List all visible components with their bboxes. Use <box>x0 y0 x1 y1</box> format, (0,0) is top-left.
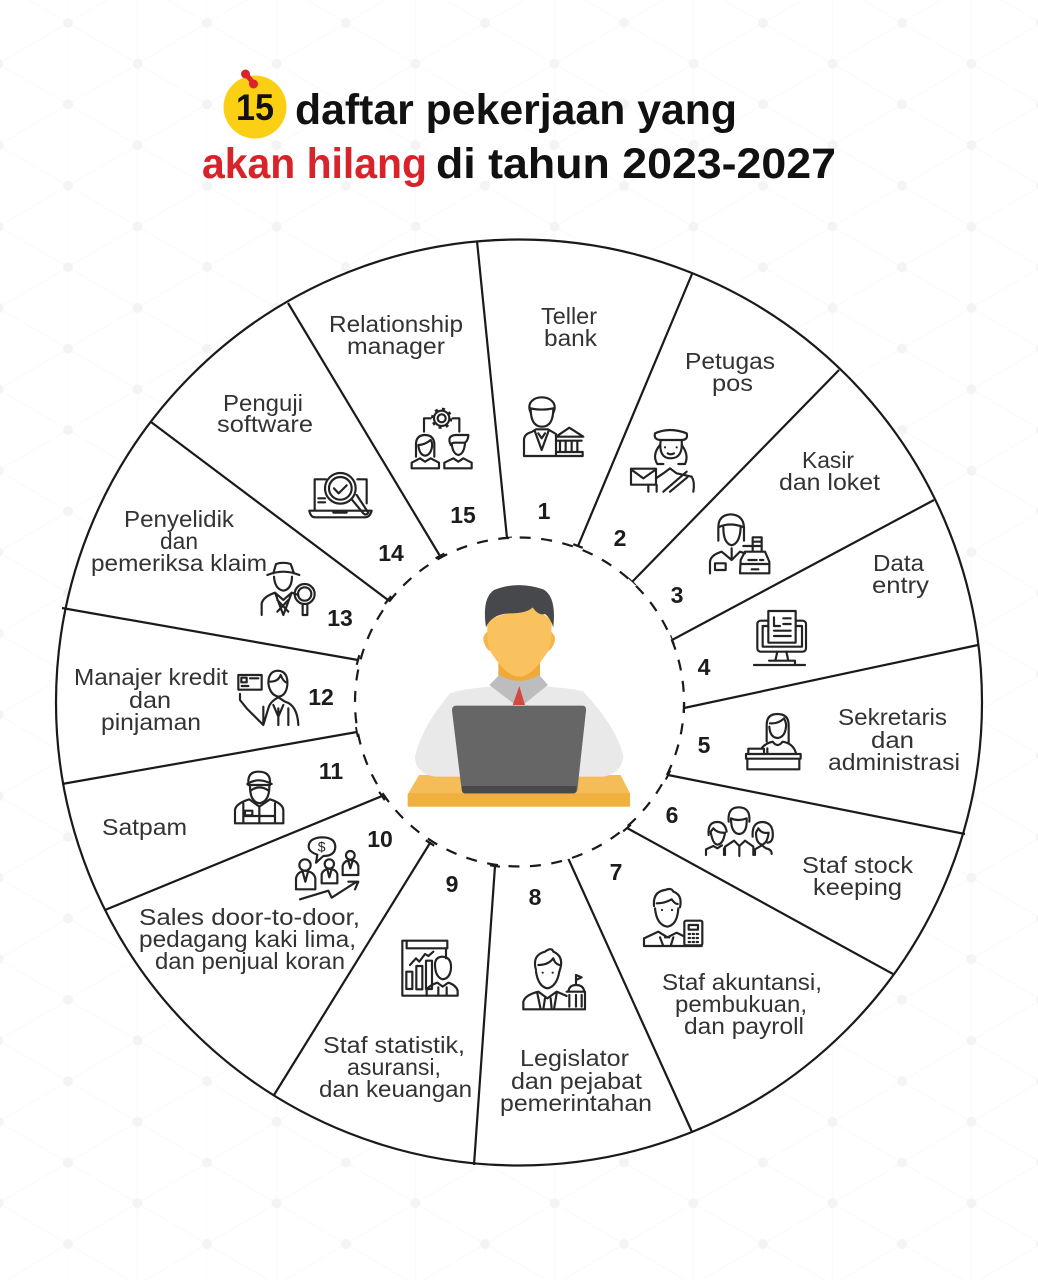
icon: yellow badge with number 15 and red pin: 15 <box>236 87 274 128</box>
label: Manajer kredit dan pinjaman: pinjaman <box>101 709 201 735</box>
number 5: 5 <box>698 732 711 758</box>
icon: laptop with magnifying glass and check <box>309 473 372 517</box>
icon: teller with bank building <box>524 397 583 456</box>
number 12: 12 <box>308 684 334 710</box>
label: Penguji software: software <box>217 411 313 437</box>
label: Petugas pos: Petugas <box>685 348 775 374</box>
label: Sales door-to-door, pedagang kaki lima, dan penjual koran: pedagang kaki lima, <box>139 926 356 952</box>
label: Penguji software <box>217 390 313 437</box>
icon: secretary at front desk <box>746 714 801 769</box>
number 9: 9 <box>446 871 458 897</box>
label: Staf akuntansi, pembukuan, dan payroll <box>662 969 822 1039</box>
number 11: 11 <box>319 758 343 784</box>
label: Penguji software: Penguji <box>223 390 303 416</box>
icon: postal worker with envelope <box>631 430 694 492</box>
label: Staf statistik, asuransi, dan keuangan: asuransi, <box>347 1054 441 1080</box>
label: Data entry <box>872 550 930 598</box>
label: Relationship manager: Relationship <box>329 311 463 337</box>
label: Kasir dan loket: Kasir <box>802 447 854 473</box>
segment 10: Sales door-to-door, pedagang kaki lima, dan penjual koran <box>139 826 393 974</box>
icon: yellow badge with number 15 and red pin <box>224 70 286 138</box>
number 4: 4 <box>698 654 711 680</box>
number 13: 13 <box>327 605 353 631</box>
label: Petugas pos: pos <box>712 370 753 396</box>
heading line 2 <box>202 140 836 188</box>
segment 13: Penyelidik dan pemeriksa klaim <box>91 506 353 631</box>
label: Staf stock keeping <box>802 852 914 900</box>
label: Legislator dan pejabat pemerintahan: dan pejabat <box>511 1068 643 1094</box>
label: Staf stock keeping: keeping <box>813 874 902 900</box>
label: Teller bank: bank <box>544 325 598 351</box>
title <box>202 70 836 188</box>
label: Penyelidik dan pemeriksa klaim <box>91 506 267 576</box>
icon: group of three people <box>706 807 773 856</box>
label: Manajer kredit dan pinjaman: dan <box>129 687 171 713</box>
label: Satpam: Satpam <box>102 814 187 840</box>
number 14: 14 <box>378 540 404 566</box>
label: Staf statistik, asuransi, dan keuangan <box>319 1032 472 1102</box>
label: Penyelidik dan pemeriksa klaim: Penyelidik <box>124 506 235 532</box>
label: Relationship manager: manager <box>347 333 445 359</box>
icon: computer monitor with document <box>754 611 806 665</box>
segment 12: Manajer kredit dan pinjaman <box>74 664 334 735</box>
icon: accountant with calculator <box>644 889 702 946</box>
label: Staf akuntansi, pembukuan, dan payroll: pembukuan, <box>675 991 807 1017</box>
label: Kasir dan loket <box>779 447 881 495</box>
segment 5: Sekretaris dan administrasi <box>698 704 960 775</box>
icon: manager holding credit card <box>238 671 298 725</box>
label: Kasir dan loket: dan loket <box>779 469 881 495</box>
segment 2: Petugas pos <box>614 348 775 551</box>
label: Teller bank <box>541 303 598 351</box>
label: Legislator dan pejabat pemerintahan <box>500 1045 652 1116</box>
segment 1: Teller bank <box>524 303 598 524</box>
label: Teller bank: Teller <box>541 303 597 329</box>
label: Staf stock keeping: Staf stock <box>802 852 914 878</box>
segment 7: Staf akuntansi, pembukuan, dan payroll <box>610 859 822 1039</box>
wheel diagram <box>56 240 982 1166</box>
icon: legislator with government building <box>523 949 585 1009</box>
label: Staf statistik, asuransi, dan keuangan: Staf statistik, <box>323 1032 465 1058</box>
label: Sekretaris dan administrasi: Sekretaris <box>838 704 947 730</box>
icon: statistician with chart board <box>402 941 458 996</box>
label: Relationship manager <box>329 311 463 359</box>
label: Sales door-to-door, pedagang kaki lima, dan penjual koran: dan penjual koran <box>155 948 345 974</box>
icon: two people connected with gear <box>412 409 472 468</box>
label: Manajer kredit dan pinjaman: Manajer kredit <box>74 664 229 690</box>
segment 4: Data entry <box>698 550 930 680</box>
label: Sekretaris dan administrasi <box>828 704 960 775</box>
heading line 2: di tahun 2023-2027 <box>436 140 836 188</box>
heading line 2: akan hilang <box>202 140 427 188</box>
segment 15: Relationship manager <box>329 311 476 528</box>
segment 11: Satpam <box>102 758 343 840</box>
number 10: 10 <box>367 826 393 852</box>
label: Sekretaris dan administrasi: administrasi <box>828 749 960 775</box>
icon: salespeople with money speech bubble and rising arrow <box>296 837 358 899</box>
label: Sekretaris dan administrasi: dan <box>871 727 914 753</box>
number 3: 3 <box>671 582 683 608</box>
label: Penyelidik dan pemeriksa klaim: dan <box>160 528 198 554</box>
number 15: 15 <box>450 502 476 528</box>
label: Sales door-to-door, pedagang kaki lima, dan penjual koran: Sales door-to-door, <box>139 904 360 930</box>
label: Staf akuntansi, pembukuan, dan payroll: Staf akuntansi, <box>662 969 822 995</box>
segment 6: Staf stock keeping <box>666 802 914 900</box>
label: Penyelidik dan pemeriksa klaim: pemeriksa klaim <box>91 550 267 576</box>
number 6: 6 <box>666 802 678 828</box>
icon: salespeople with money speech bubble and rising arrow: $ <box>318 839 326 855</box>
label: Manajer kredit dan pinjaman <box>74 664 229 735</box>
segment 3: Kasir dan loket <box>671 447 881 608</box>
number 7: 7 <box>610 859 622 885</box>
label: Legislator dan pejabat pemerintahan: pemerintahan <box>500 1090 652 1116</box>
label: Data entry: Data <box>873 550 924 576</box>
label: Staf statistik, asuransi, dan keuangan: dan keuangan <box>319 1076 472 1102</box>
segment 8: Legislator dan pejabat pemerintahan <box>500 884 652 1116</box>
number 8: 8 <box>529 884 542 910</box>
icon: cashier with register <box>710 514 769 573</box>
icon: security guard with cap and mask <box>235 772 283 823</box>
number 2: 2 <box>614 525 626 551</box>
label: Staf akuntansi, pembukuan, dan payroll: dan payroll <box>684 1013 804 1039</box>
icon: detective with magnifying glass <box>262 563 315 615</box>
number 1: 1 <box>538 498 551 524</box>
central illustration: office worker at laptop <box>408 585 630 807</box>
label: Data entry: entry <box>872 572 930 598</box>
wheel outline and spokes <box>56 240 982 1166</box>
segment 9: Staf statistik, asuransi, dan keuangan <box>319 871 472 1102</box>
label: Sales door-to-door, pedagang kaki lima, dan penjual koran <box>139 904 360 974</box>
heading line 1: daftar pekerjaan yang <box>295 86 737 134</box>
label: Legislator dan pejabat pemerintahan: Legislator <box>520 1045 629 1071</box>
segment 14: Penguji software <box>217 390 404 566</box>
label: Petugas pos <box>685 348 775 396</box>
